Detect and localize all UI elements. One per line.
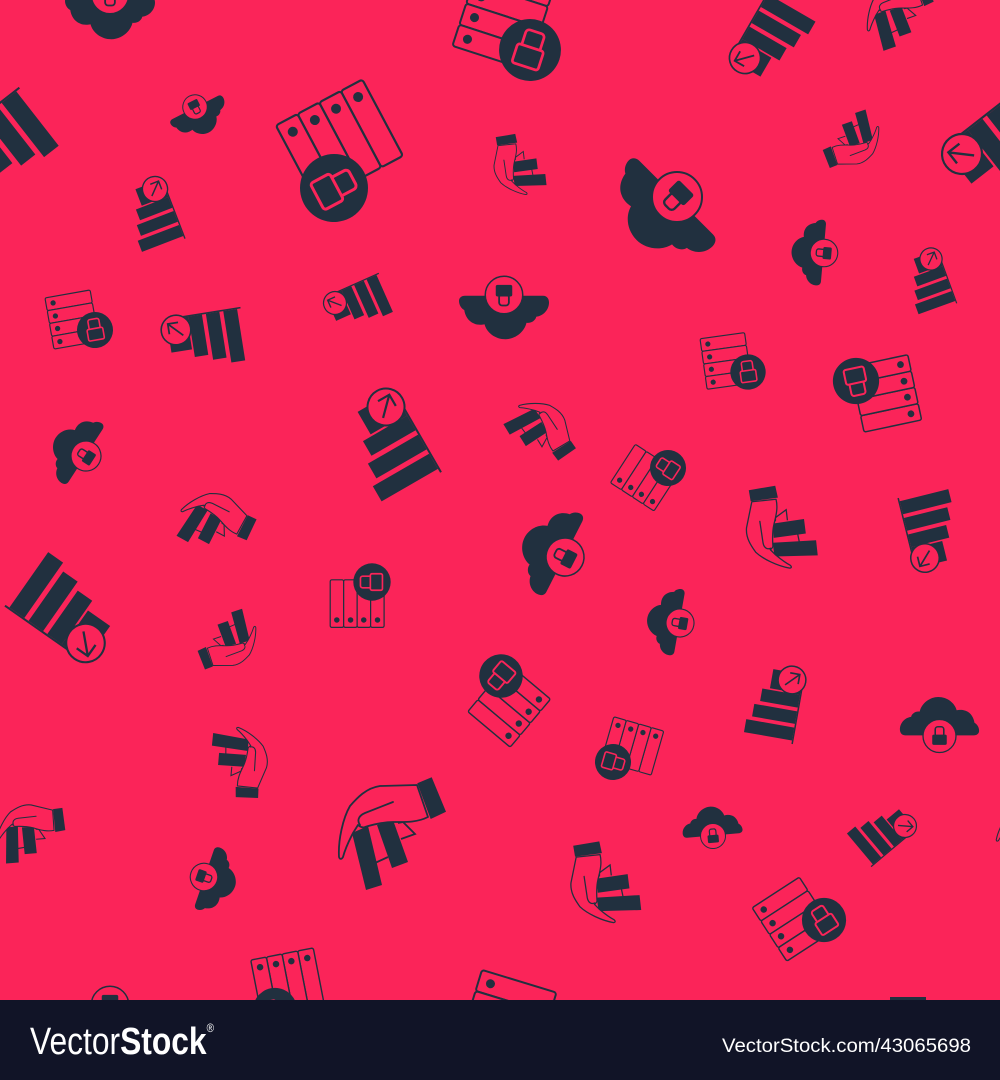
logo: VectorStock: ® bbox=[207, 1021, 214, 1035]
icon: stacked bars with arrow, upper left bbox=[118, 173, 187, 255]
icon: hand with bars, centre right bbox=[734, 480, 831, 574]
icon: server with lock, lower centre bbox=[453, 645, 555, 747]
icon: stacked bars with arrow, upper centre left bbox=[320, 271, 395, 337]
icon: server with lock, centre right bbox=[700, 330, 768, 395]
icon: server with lock, middle left bbox=[330, 563, 391, 627]
icon: server with lock, top bbox=[449, 0, 581, 89]
icon: cloud with lock, left bbox=[37, 407, 118, 494]
icon: stacked bars with arrow, left bbox=[159, 305, 249, 373]
icon: cloud with lock, right bbox=[900, 697, 979, 752]
icon: hand with bars, lower left bbox=[197, 608, 256, 670]
icon: server with lock, lower centre right bbox=[591, 715, 664, 790]
icon: hand with bars, lower left middle bbox=[193, 719, 282, 806]
icon: hand with bars, large bbox=[339, 777, 446, 890]
icon: server with lock, centre bbox=[610, 431, 693, 514]
icon: cloud with lock, upper left bbox=[163, 83, 234, 146]
icon: hand with bars, lower centre bbox=[558, 836, 654, 928]
icon: hand with bars, top right bbox=[867, 0, 934, 51]
footer band bbox=[0, 1000, 1000, 1080]
icon: stacked bars with arrow, right edge bbox=[934, 82, 1000, 210]
icon: cloud with lock, large bbox=[593, 137, 737, 281]
icon: bars fragment above footer bbox=[890, 997, 926, 1000]
icon: cloud with lock, lower left bbox=[180, 841, 245, 919]
icon: cloud with lock, top left bbox=[65, 0, 155, 39]
icon: cloud with lock, bottom left bbox=[65, 986, 155, 1049]
icon: server with lock, left bbox=[45, 287, 116, 355]
image id url: VectorStock.com/43065698 bbox=[722, 1036, 971, 1057]
icon: hand with bars, right edge bbox=[991, 794, 1000, 876]
icon: hand with bars, upper centre bbox=[485, 130, 556, 199]
icon: cloud with lock, upper centre bbox=[459, 276, 549, 339]
icon: hand with bars, centre bbox=[500, 396, 578, 470]
icon: stacked bars with arrow, bottom right bbox=[845, 794, 921, 868]
icon: server with lock, right bbox=[829, 347, 922, 436]
icon: stacked bars with arrow, top right bbox=[724, 0, 817, 93]
icon: stacked bars with arrow, left edge bbox=[0, 85, 62, 210]
icon: cloud with lock, upper right bbox=[789, 217, 841, 287]
icon: hand with bars, upper right bbox=[822, 109, 879, 169]
icon: server with lock, lower right bbox=[752, 867, 855, 968]
icon: stacked bars with arrow, lower right bbox=[743, 660, 808, 744]
icon: hand with bars, left centre bbox=[166, 477, 263, 573]
logo: VectorStock: VectorStock bbox=[30, 1021, 224, 1063]
icon: cloud with lock, lower right bbox=[681, 804, 744, 851]
icon: hand with bars, left edge bbox=[0, 794, 71, 876]
icon: server with lock, bottom centre bbox=[453, 970, 582, 1080]
icon: server with lock, large bbox=[265, 79, 417, 234]
icon: stacked bars with arrow, large bbox=[333, 382, 444, 505]
icon: cloud with lock, centre right bbox=[642, 584, 700, 659]
icon: cloud with lock, centre bbox=[504, 496, 603, 606]
icon: stacked bars with arrow, right bbox=[896, 486, 967, 575]
icon: stacked bars with arrow, upper right bbox=[898, 245, 959, 317]
icon: server with lock, bottom left bbox=[243, 948, 328, 1036]
icon: stacked bars with arrow, large left bbox=[3, 549, 132, 670]
